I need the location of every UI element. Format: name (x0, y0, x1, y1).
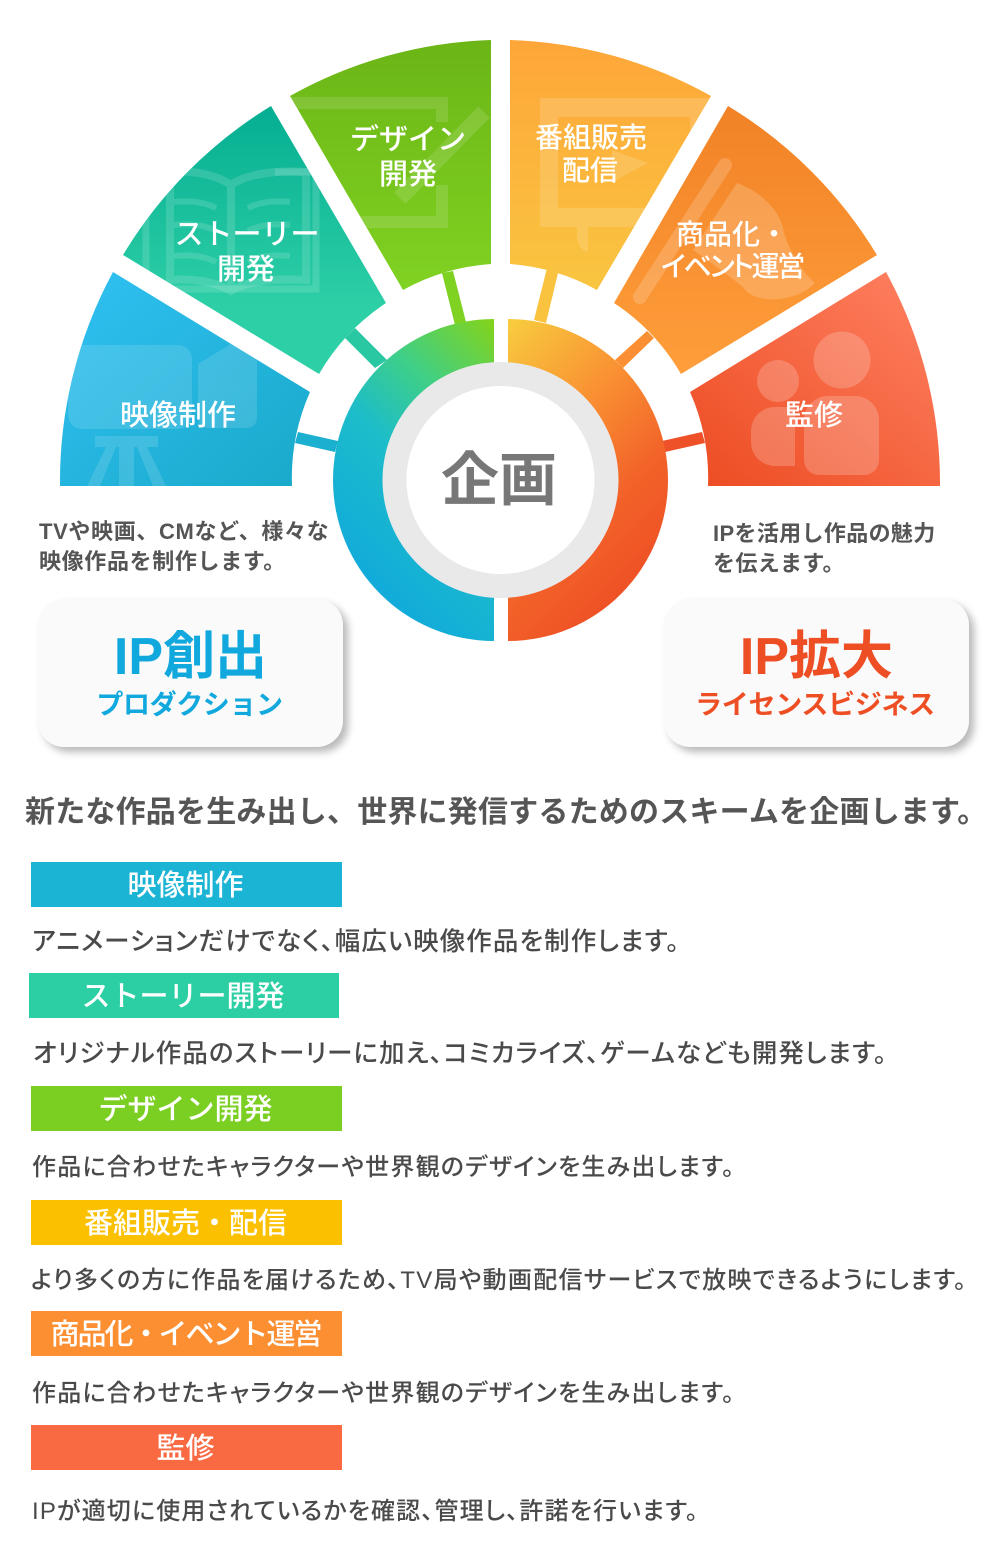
sector: 商品化・イベント運営 (614, 106, 877, 374)
sector: 番組販売配信 (510, 40, 715, 323)
description: ストーリー開発: オリジナル作品のストーリーに加え、コミカライズ、ゲームなども開発します。 (33, 1040, 888, 1068)
sector: 映像制作: 映像制作 (120, 399, 236, 432)
sector: 監修 (662, 272, 940, 486)
label: デザイン開発 (31, 1086, 342, 1131)
label: 番組販売・配信 (31, 1200, 342, 1245)
label: 映像制作 (31, 862, 342, 907)
center circle: 企画 (441, 448, 557, 513)
panel: IP拡大: IP拡大 (740, 628, 893, 686)
heading: 新たな作品を生み出し、世界に発信するためのスキームを企画します。 (25, 796, 988, 829)
sector: 番組販売配信: 番組販売 (535, 122, 647, 153)
caption: right: を伝えます。 (713, 550, 845, 576)
panel: IP拡大: ライセンスビジネス (695, 690, 935, 720)
sector: 番組販売配信: 配信 (562, 155, 618, 186)
icon: two people (751, 332, 879, 475)
caption: right: IPを活用し作品の魅力 (713, 521, 936, 546)
caption: left: TVや映画、CMなど、様々な (39, 519, 329, 544)
icon: pencil and frame (290, 103, 484, 222)
caption: left (39, 519, 329, 574)
icon: video camera (68, 344, 257, 486)
sector: 映像制作 (60, 272, 338, 487)
sector: 商品化・イベント運営: イベント運営 (661, 251, 803, 282)
sector: 商品化・イベント運営: 商品化・ (676, 219, 788, 250)
center circle (382, 362, 618, 598)
panel: IP拡大 (664, 599, 969, 747)
sector: デザイン開発 (290, 40, 491, 325)
icon: megaphone (640, 165, 815, 299)
sector: ストーリー開発: ストーリー (174, 219, 320, 251)
caption: left: 映像作品を制作します。 (39, 548, 286, 574)
panel: IP創出 (38, 599, 343, 747)
icon: monitor with play (540, 98, 715, 252)
sector: 監修: 監修 (785, 399, 843, 432)
label: デザイン開発: デザイン開発 (98, 1094, 272, 1126)
caption: right (713, 521, 936, 576)
center ring: left half (333, 319, 494, 641)
wheel diagram (60, 40, 940, 641)
panel: IP創出: プロダクション (96, 690, 283, 720)
label: 番組販売・配信: 番組販売・配信 (84, 1208, 287, 1240)
label: 監修 (31, 1425, 342, 1470)
sector: ストーリー開発 (123, 106, 387, 374)
panel: IP創出: IP創出 (114, 628, 267, 686)
label: ストーリー開発 (29, 973, 339, 1018)
description: 商品化・イベント運営: 作品に合わせたキャラクターや世界観のデザインを生み出します。 (32, 1380, 735, 1407)
description: 番組販売・配信: より多くの方に作品を届けるため、TV局や動画配信サービスで放映できるようにします。 (31, 1267, 967, 1294)
label: 商品化・イベント運営 (31, 1311, 342, 1356)
icon: open book (146, 172, 316, 291)
sector: デザイン開発: デザイン (350, 123, 466, 156)
label: 映像制作: 映像制作 (127, 870, 244, 902)
center ring: right half (508, 319, 668, 641)
description: デザイン開発: 作品に合わせたキャラクターや世界観のデザインを生み出します。 (32, 1154, 735, 1181)
description: 映像制作: アニメーションだけでなく、幅広い映像作品を制作します。 (32, 928, 680, 956)
label: 監修: 監修 (156, 1433, 214, 1465)
label: 商品化・イベント運営: 商品化・イベント運営 (50, 1319, 320, 1351)
sector: ストーリー開発: 開発 (217, 253, 275, 286)
sector: デザイン開発: 開発 (379, 158, 437, 191)
description: 監修: IPが適切に使用されているかを確認、管理し、許諾を行います。 (32, 1498, 699, 1525)
label: ストーリー開発: ストーリー開発 (81, 981, 284, 1013)
